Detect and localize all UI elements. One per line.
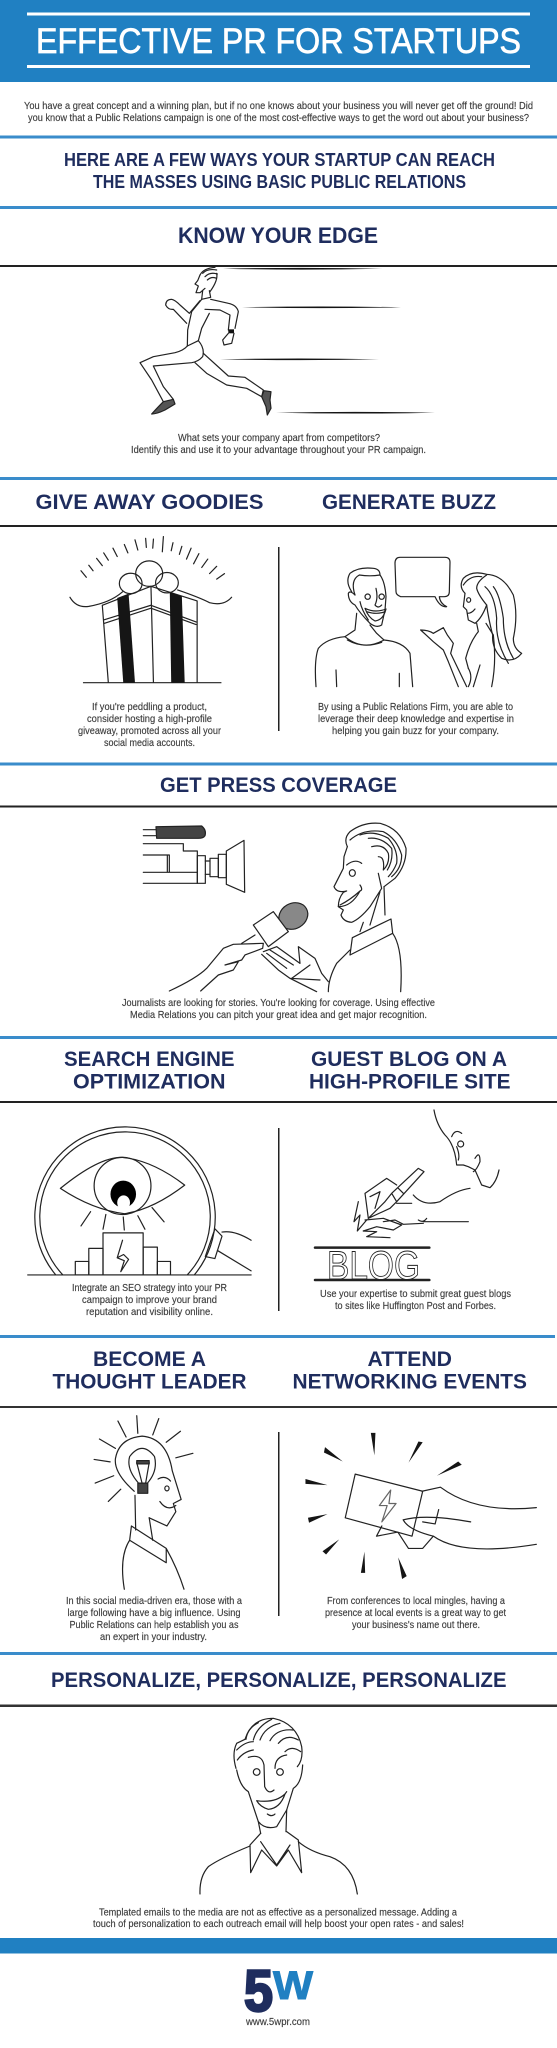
heading: ways to reach the masses: THE MASSES USING BASIC PUBLIC RELATIONS	[93, 172, 466, 192]
panel: guest blog	[309, 1048, 511, 1312]
heading: GUEST BLOG ON A	[311, 1048, 507, 1071]
panel: give away goodies	[36, 491, 264, 749]
heading: ways to reach the masses: HERE ARE A FEW WAYS YOUR STARTUP CAN REACH	[64, 150, 495, 170]
icon: magnifying glass over eye	[28, 1127, 251, 1275]
heading: GET PRESS COVERAGE	[160, 774, 397, 797]
caption: If you're peddling a product,	[92, 701, 207, 713]
caption: From conferences to local mingles, having a	[327, 1595, 505, 1607]
panel: personalize	[0, 1669, 557, 1930]
caption: giveaway, promoted across all your	[78, 725, 221, 737]
caption: large following have a big influence. Using	[68, 1607, 241, 1619]
heading: NETWORKING EVENTS	[292, 1370, 527, 1394]
caption: Media Relations you can pitch your great idea and get major recognition.	[130, 1009, 427, 1021]
caption	[93, 1906, 464, 1930]
caption	[66, 1595, 242, 1643]
heading: GENERATE BUZZ	[322, 491, 496, 514]
caption	[131, 432, 426, 456]
icon: hand holding business card	[305, 1433, 536, 1579]
caption: In this social media-driven era, those with a	[66, 1595, 242, 1607]
caption: touch of personalization to each outreach email will help boost your open rates - and sales!	[93, 1918, 464, 1930]
heading: OPTIMIZATION	[73, 1070, 226, 1094]
caption	[318, 701, 514, 737]
heading	[52, 1348, 246, 1394]
caption	[72, 1282, 227, 1318]
caption: Identify this and use it to your advantage throughout your PR campaign.	[131, 444, 426, 456]
icon: two people talking	[315, 557, 522, 687]
heading: THOUGHT LEADER	[52, 1370, 246, 1394]
caption: reputation and visibility online.	[86, 1306, 213, 1318]
text block: intro	[24, 100, 533, 124]
caption: Integrate an SEO strategy into your PR	[72, 1282, 227, 1294]
icon: blog wordmark: BLOG	[327, 1244, 420, 1288]
icon: running man	[140, 267, 271, 415]
heading	[292, 1348, 527, 1394]
caption: Public Relations can help establish you as	[70, 1619, 238, 1631]
icon: smiling man portrait	[200, 1718, 357, 1894]
panel: generate buzz	[315, 491, 522, 737]
caption: an expert in your industry.	[100, 1631, 207, 1643]
caption	[325, 1595, 506, 1631]
icon: gift box	[70, 537, 232, 683]
icon: hand writing blog	[315, 1110, 499, 1280]
heading: ATTEND	[368, 1348, 452, 1371]
caption: your business's name out there.	[352, 1619, 480, 1631]
heading	[64, 1048, 234, 1094]
heading: KNOW YOUR EDGE	[178, 223, 378, 248]
icon: interviewee with microphone	[169, 823, 406, 992]
panel: know your edge	[0, 223, 557, 456]
caption: helping you gain buzz for your company.	[332, 725, 499, 737]
heading: SEARCH ENGINE	[64, 1048, 234, 1071]
caption: social media accounts.	[104, 737, 195, 749]
icon: speed lines	[220, 268, 435, 414]
panel: thought leader	[52, 1348, 246, 1643]
caption	[320, 1288, 511, 1312]
heading: ways to reach the masses	[64, 150, 495, 192]
caption: By using a Public Relations Firm, you are able to	[318, 701, 513, 713]
heading: HIGH-PROFILE SITE	[309, 1070, 510, 1094]
caption: leverage their deep knowledge and expertise in	[318, 713, 514, 725]
logo: 5W: W	[273, 1964, 313, 2008]
caption: Journalists are looking for stories. You're looking for coverage. Using effective	[122, 997, 435, 1009]
caption: consider hosting a high-profile	[87, 713, 212, 725]
logo: 5W	[244, 1959, 313, 2024]
panel: networking events	[292, 1348, 536, 1631]
panel: header banner	[0, 0, 557, 82]
title: EFFECTIVE PR FOR STARTUPS	[36, 22, 521, 61]
caption: campaign to improve your brand	[82, 1294, 217, 1306]
caption: Use your expertise to submit great guest blogs	[320, 1288, 511, 1300]
icon: video camera	[143, 826, 245, 892]
icon: head with light bulb	[94, 1416, 193, 1589]
caption: to sites like Huffington Post and Forbes.	[335, 1300, 496, 1312]
caption: Templated emails to the media are not as effective as a personalized message. Adding a	[99, 1906, 457, 1918]
heading	[309, 1048, 510, 1094]
caption	[78, 701, 221, 749]
heading: GIVE AWAY GOODIES	[36, 491, 264, 514]
heading: PERSONALIZE, PERSONALIZE, PERSONALIZE	[51, 1669, 506, 1692]
footer band	[0, 1938, 557, 1954]
panel: get press coverage	[0, 774, 557, 1021]
website url: www.5wpr.com	[245, 2016, 310, 2028]
caption: What sets your company apart from competitors?	[178, 432, 380, 444]
caption	[122, 997, 435, 1021]
logo: 5W: 5	[244, 1959, 273, 2024]
panel: search engine optimization	[28, 1048, 251, 1318]
heading: BECOME A	[93, 1348, 206, 1371]
caption: presence at local events is a great way to get	[325, 1607, 506, 1619]
